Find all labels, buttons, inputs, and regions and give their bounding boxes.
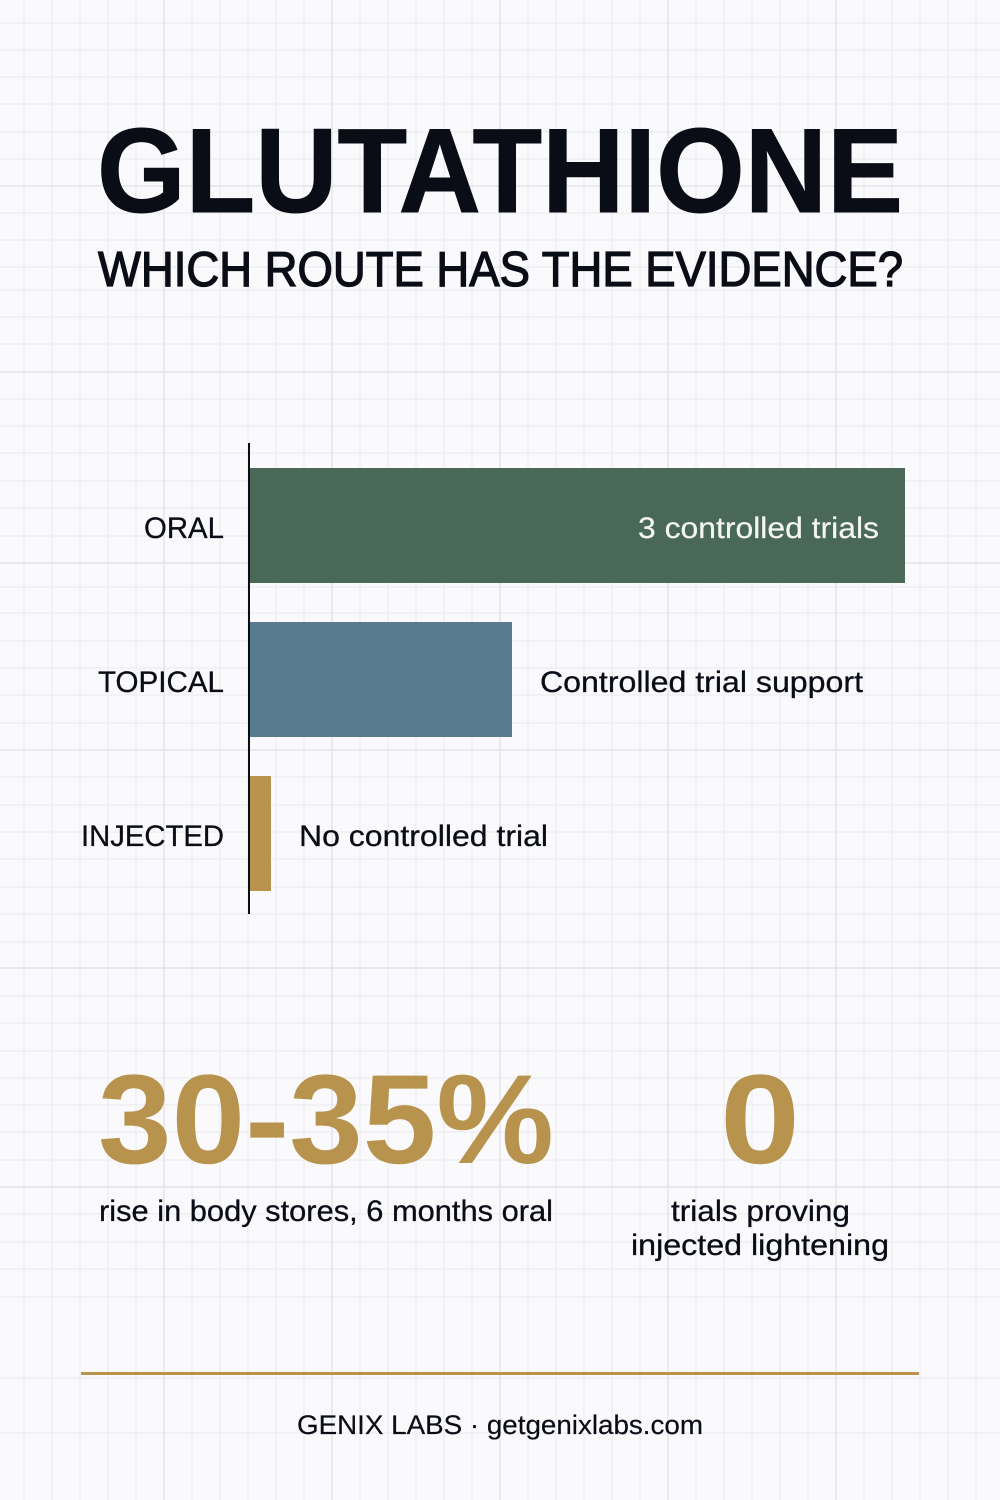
subtitle: WHICH ROUTE HAS THE EVIDENCE? [98,243,903,297]
stat caption: rise in body stores, 6 months oral [99,1195,553,1228]
injected bar [250,776,271,891]
bar chart: evidence by route [81,443,905,914]
stat: 30-35% [98,1048,554,1228]
topical value label: Controlled trial support [540,666,864,699]
stat number: 0 [720,1048,800,1190]
stat caption [631,1195,889,1262]
bar: injected [81,776,548,891]
chart axis [248,443,250,914]
row label: oral: ORAL [144,512,224,545]
stat: zero trials [631,1048,889,1262]
bar: oral [144,468,905,583]
stat caption: trials proving [671,1195,850,1228]
footer rule [81,1372,919,1375]
row label: topical: TOPICAL [98,666,224,699]
stat number: 30-35% [98,1048,554,1190]
title: GLUTATHIONE [97,104,903,238]
injected value label: No controlled trial [299,820,548,853]
row label: injected: INJECTED [81,820,224,853]
footer text: GENIX LABS · getgenixlabs.com [297,1410,703,1440]
topical bar [250,622,512,737]
stat caption: injected lightening [631,1229,889,1262]
oral bar [250,468,905,583]
oral value label: 3 controlled trials [638,512,879,545]
bar: topical [98,622,864,737]
